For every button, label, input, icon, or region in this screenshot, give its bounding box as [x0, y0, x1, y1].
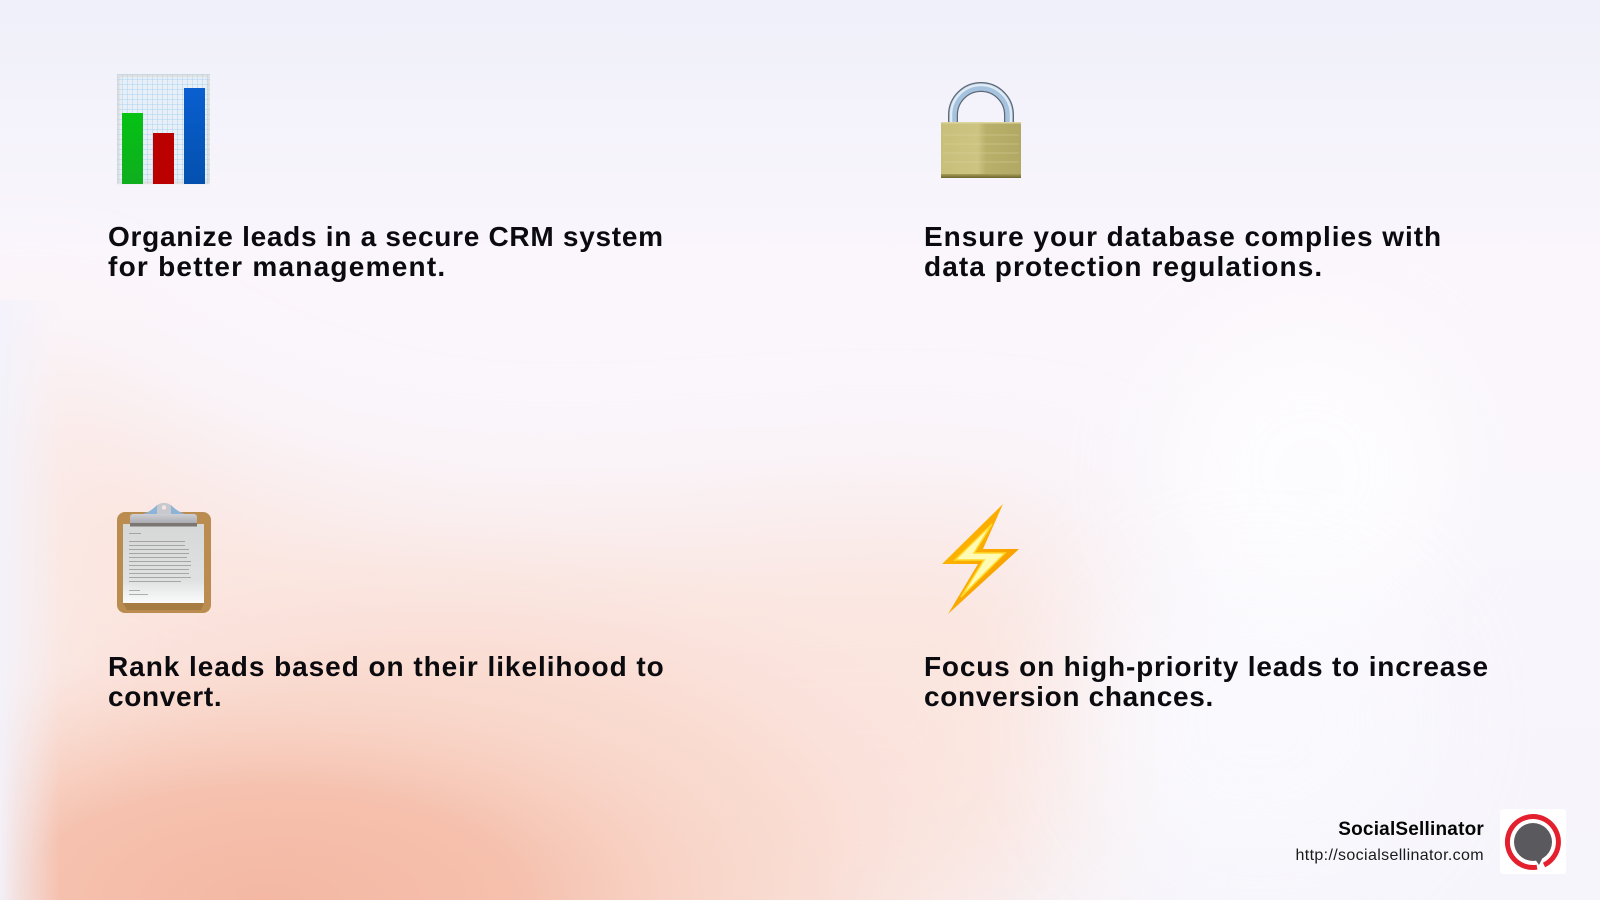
- text: organize leads: [108, 221, 664, 282]
- text: organize leads: Organize leads in a secure CRM system: [108, 221, 664, 252]
- icon: brand logo: [1500, 809, 1566, 874]
- text: high-priority leads: conversion chances.: [924, 681, 1214, 712]
- brand url: http://socialsellinator.com: [1296, 847, 1484, 864]
- text: data protection: data protection regulations.: [924, 251, 1323, 282]
- text: organize leads: for better management.: [108, 251, 446, 282]
- icon: bar chart: [117, 74, 210, 184]
- text: data protection: Ensure your database complies with: [924, 221, 1442, 252]
- text: high-priority leads: [924, 651, 1489, 712]
- text: rank leads: convert.: [108, 681, 222, 712]
- text: rank leads: [108, 651, 665, 712]
- icon: lightning bolt: [942, 504, 1019, 614]
- text: high-priority leads: Focus on high-priority leads to increase: [924, 651, 1489, 682]
- icon: padlock: [941, 82, 1021, 178]
- text: rank leads: Rank leads based on their likelihood to: [108, 651, 665, 682]
- text: data protection: [924, 221, 1442, 282]
- icon: clipboard: [117, 503, 211, 613]
- brand name: SocialSellinator: [1338, 819, 1484, 840]
